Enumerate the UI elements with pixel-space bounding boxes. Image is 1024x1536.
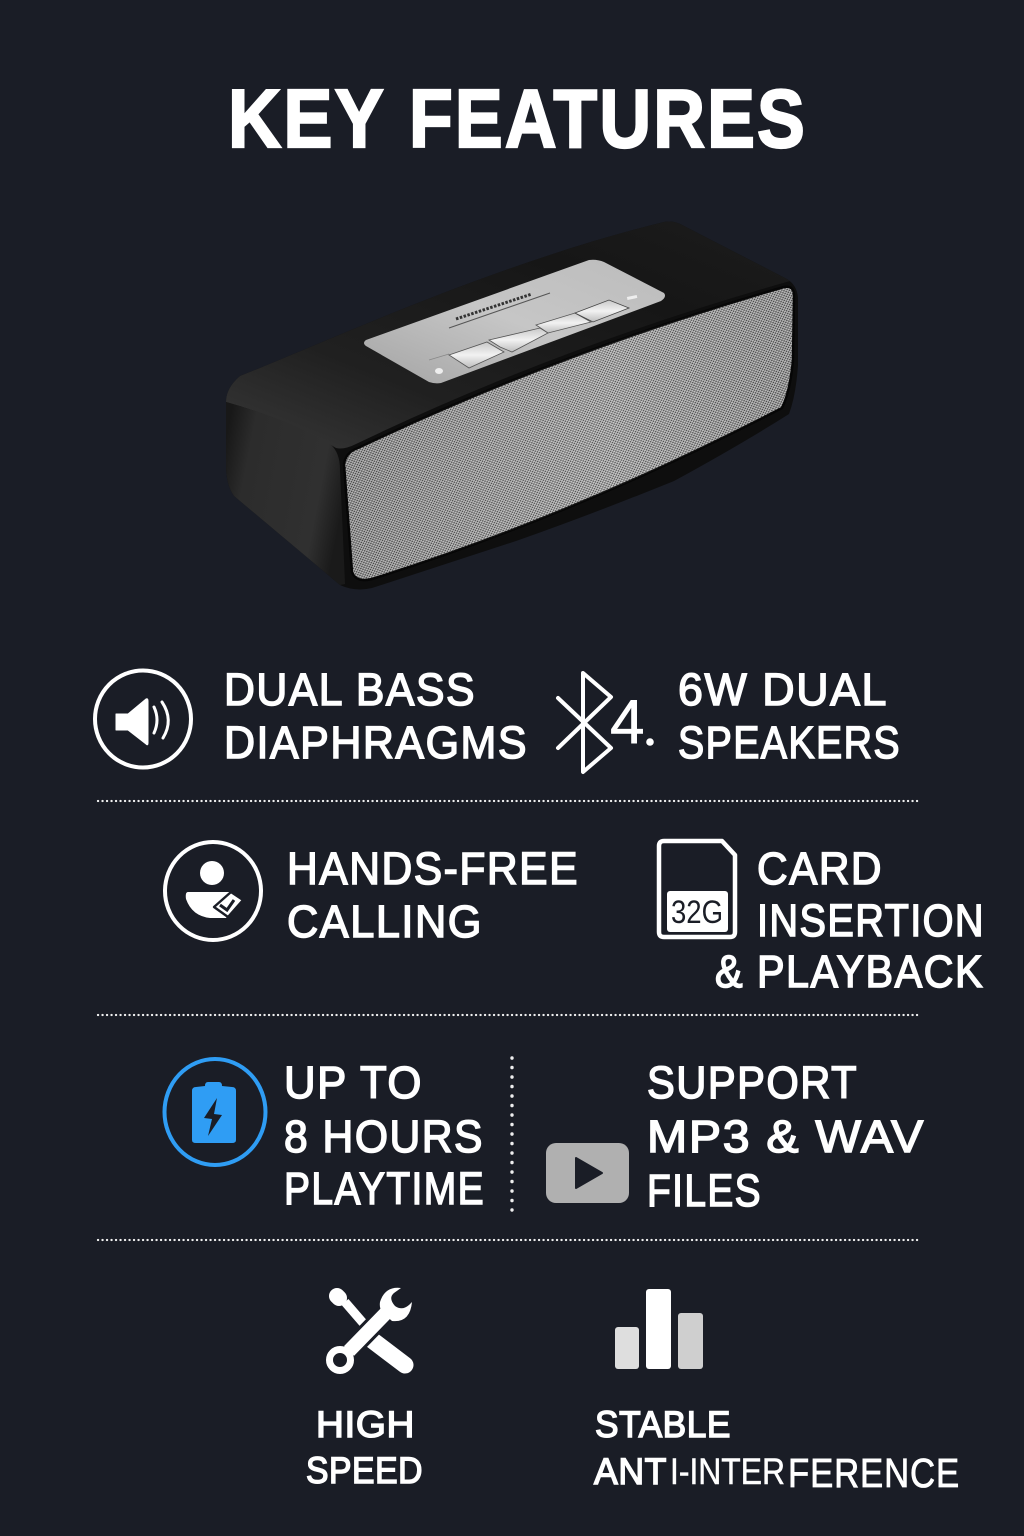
text: stable anti-interference: ANT	[594, 1450, 667, 1492]
icon: signal bars	[615, 1289, 703, 1369]
text: card insertion & playback: INSERTION	[757, 895, 985, 946]
speaker grille	[344, 287, 794, 580]
text: hands-free calling: HANDS-FREE	[287, 843, 579, 894]
text: stable anti-interference: STABLE	[595, 1403, 731, 1445]
speaker body	[226, 222, 798, 589]
text: hands-free calling: CALLING	[287, 896, 483, 947]
icon: 32G memory card: 32G	[671, 894, 723, 930]
feature row 4	[306, 1288, 960, 1496]
text: up to 8 hours playtime	[284, 1057, 485, 1214]
text: stable anti-interference: I-INTER	[670, 1451, 785, 1492]
text: dual bass diaphragms: DUAL BASS	[224, 664, 476, 715]
text: high speed: SPEED	[306, 1449, 423, 1491]
feature row 2	[165, 841, 985, 997]
text: stable anti-interference	[594, 1403, 960, 1496]
text: support mp3 & wav files: FILES	[647, 1165, 762, 1216]
text: card insertion & playback: & PLAYBACK	[715, 946, 984, 997]
text: 6w dual speakers: 6W DUAL	[678, 664, 888, 715]
text: support mp3 & wav files: MP3 & WAV	[647, 1111, 925, 1162]
text: up to 8 hours playtime: 8 HOURS	[284, 1111, 484, 1162]
panel buttons	[449, 342, 504, 368]
control panel	[364, 260, 665, 383]
text: support mp3 & wav files	[647, 1057, 925, 1216]
text: up to 8 hours playtime: UP TO	[284, 1057, 423, 1108]
text: high speed	[306, 1403, 423, 1491]
product image: bluetooth speaker	[226, 222, 798, 589]
text: 6w dual speakers: SPEAKERS	[678, 717, 901, 768]
text: high speed: HIGH	[316, 1403, 415, 1445]
text: dual bass diaphragms: DIAPHRAGMS	[224, 717, 528, 768]
icon: bluetooth 4.	[558, 673, 654, 772]
icon: play button	[546, 1143, 629, 1203]
text: card insertion & playback	[715, 843, 985, 997]
feature row 1	[95, 664, 901, 772]
icon: crossed tools	[330, 1288, 412, 1370]
text: hands-free calling	[287, 843, 579, 947]
icon: speaker in circle	[95, 670, 191, 768]
icon: hands-free person with phone	[165, 842, 261, 940]
icon: battery in blue circle	[164, 1059, 266, 1165]
title	[228, 72, 807, 165]
speaker top face	[226, 222, 790, 448]
feature row 3	[164, 1057, 925, 1216]
title: FEATURES	[409, 72, 807, 165]
text: stable anti-interference: FERENCE	[788, 1450, 960, 1496]
text: support mp3 & wav files: SUPPORT	[647, 1057, 858, 1108]
title: KEY	[228, 72, 386, 165]
icon: bluetooth 4.: 4	[610, 688, 644, 757]
text: card insertion & playback: CARD	[757, 843, 883, 894]
icon: 32G memory card	[659, 841, 735, 937]
speaker side face	[226, 402, 345, 585]
text: 6w dual speakers	[678, 664, 901, 768]
text: up to 8 hours playtime: PLAYTIME	[284, 1163, 485, 1214]
text: dual bass diaphragms	[224, 664, 528, 768]
